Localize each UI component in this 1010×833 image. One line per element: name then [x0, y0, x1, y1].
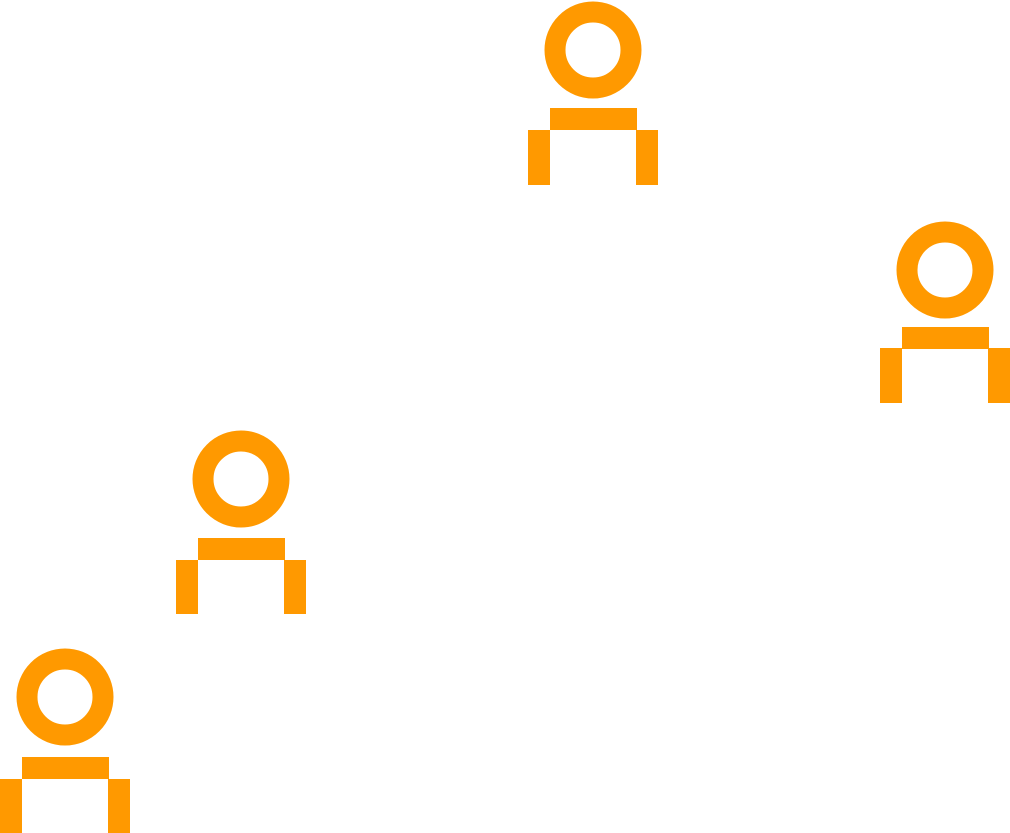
icon: person right	[880, 232, 1010, 403]
icon: person middle left	[176, 441, 306, 614]
icon: person bottom left	[0, 659, 130, 833]
icon: person top center	[528, 12, 658, 185]
